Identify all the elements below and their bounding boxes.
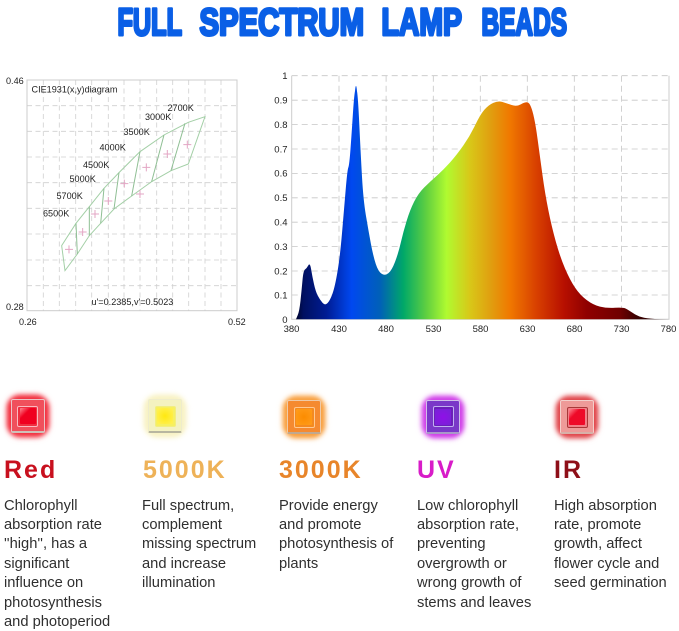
description: 5000K: complement: [142, 517, 222, 533]
description: Red: and photoperiod: [4, 614, 110, 630]
chart: CIE1931 diagram: [6, 76, 246, 327]
CIE axis and temperature labels: 4500K: [83, 160, 109, 170]
x axis labels: 530: [426, 324, 441, 335]
y axis labels: 0.9: [274, 96, 288, 106]
description: 5000K: Full spectrum,: [142, 498, 234, 514]
description: 5000K: illumination: [142, 575, 215, 591]
CIE axis and temperature labels: [6, 76, 246, 327]
CIE axis and temperature labels: 0.28: [6, 302, 24, 312]
CIE axis and temperature labels: 0.46: [6, 76, 24, 86]
description: 5000K: and increase: [142, 556, 226, 572]
title: LAMP: [382, 2, 462, 44]
x axis labels: 580: [473, 324, 488, 335]
x axis labels: 430: [331, 324, 347, 335]
CIE axis and temperature labels: 4000K: [100, 142, 126, 152]
title: SPECTRUM: [200, 2, 364, 44]
chart: spectrum: [274, 71, 676, 335]
CIE axis and temperature labels: 3500K: [124, 127, 150, 137]
title: BEADS: [482, 2, 567, 44]
panel: 5000K: [141, 392, 256, 591]
description: UV: preventing: [417, 536, 486, 552]
description: UV: overgrowth or: [417, 556, 507, 572]
CIE axis and temperature labels: 0.26: [19, 317, 37, 327]
panel: UV: [417, 392, 531, 611]
x axis labels: 380: [284, 324, 299, 335]
CIE axis and temperature labels: 2700K: [168, 103, 194, 113]
description: 3000K: photosynthesis of: [279, 536, 393, 552]
y axis labels: 0.8: [274, 120, 288, 131]
description: UV: [417, 498, 531, 611]
CIE color temperature quadrilaterals: [62, 117, 205, 271]
description: 5000K: missing spectrum: [142, 536, 256, 552]
description: UV: absorption rate,: [417, 517, 519, 533]
description: Red: significant: [4, 556, 69, 572]
CIE axis and temperature labels: u'=0.2385,v'=0.5023: [92, 297, 173, 307]
description: UV: Low chlorophyll: [417, 498, 518, 514]
label: UV: UV: [417, 456, 456, 484]
icon: red LED: [2, 390, 54, 442]
y axis labels: 0.3: [274, 242, 288, 253]
title: [118, 2, 568, 44]
panel: 3000K: [278, 392, 394, 572]
description: Red: photosynthesis: [4, 595, 102, 611]
y axis labels: 0.2: [274, 266, 288, 277]
y axis labels: 0.4: [274, 218, 288, 228]
label: 3000K: 3000K: [279, 456, 363, 484]
icon: IR LED: [552, 392, 602, 442]
x axis labels: 730: [614, 324, 629, 335]
CIE axis and temperature labels: 0.52: [228, 317, 246, 327]
description: IR: rate, promote: [554, 517, 641, 533]
y axis labels: 1: [282, 71, 288, 82]
description: IR: flower cycle and: [554, 556, 659, 572]
description: UV: stems and leaves: [417, 595, 531, 611]
title: FULL: [118, 2, 182, 44]
description: Red: absorption rate: [4, 517, 102, 533]
icon: yellow LED: [141, 392, 189, 440]
y axis labels: 0.6: [274, 169, 288, 180]
y axis labels: 0.7: [274, 144, 288, 156]
label: IR: IR: [554, 456, 583, 484]
x axis labels: 780: [661, 324, 676, 335]
y axis labels: [274, 71, 288, 326]
label: Red: Red: [4, 456, 57, 484]
description: UV: wrong growth of: [417, 575, 522, 591]
description: 3000K: and promote: [279, 517, 361, 533]
y axis labels: 0.1: [274, 290, 288, 302]
spectrum curve: [296, 86, 669, 319]
y axis labels: 0.5: [274, 193, 288, 204]
description: IR: [554, 498, 667, 591]
CIE axis and temperature labels: 6500K: [43, 208, 69, 218]
description: 3000K: Provide energy: [279, 498, 378, 514]
description: IR: High absorption: [554, 498, 657, 514]
description: IR: growth, affect: [554, 536, 642, 552]
description: 3000K: [279, 498, 394, 572]
description: 3000K: plants: [279, 556, 318, 572]
CIE axis and temperature labels: 5700K: [56, 191, 83, 201]
CIE axis and temperature labels: 3000K: [145, 112, 171, 122]
label: 5000K: 5000K: [143, 456, 227, 484]
description: Red: Chlorophyll: [4, 498, 77, 514]
description: 5000K: [142, 498, 256, 591]
CIE axis and temperature labels: 5000K: [70, 174, 96, 184]
x axis labels: 680: [567, 324, 582, 335]
panel: Red: [2, 390, 110, 630]
CIE axis and temperature labels: CIE1931(x,y)diagram: [32, 84, 117, 94]
x axis labels: 480: [378, 324, 394, 335]
icon: orange LED: [278, 392, 330, 442]
chromaticity cross markers: [65, 141, 191, 253]
description: Red: influence on: [4, 575, 83, 591]
x axis labels: [284, 324, 676, 335]
description: Red: ''high'', has a: [4, 536, 87, 552]
panel: IR: [552, 392, 667, 591]
icon: UV LED: [418, 392, 468, 442]
description: Red: [4, 498, 110, 630]
y axis labels: 0: [282, 315, 288, 326]
description: IR: seed germination: [554, 575, 667, 591]
x axis labels: 630: [520, 324, 535, 335]
